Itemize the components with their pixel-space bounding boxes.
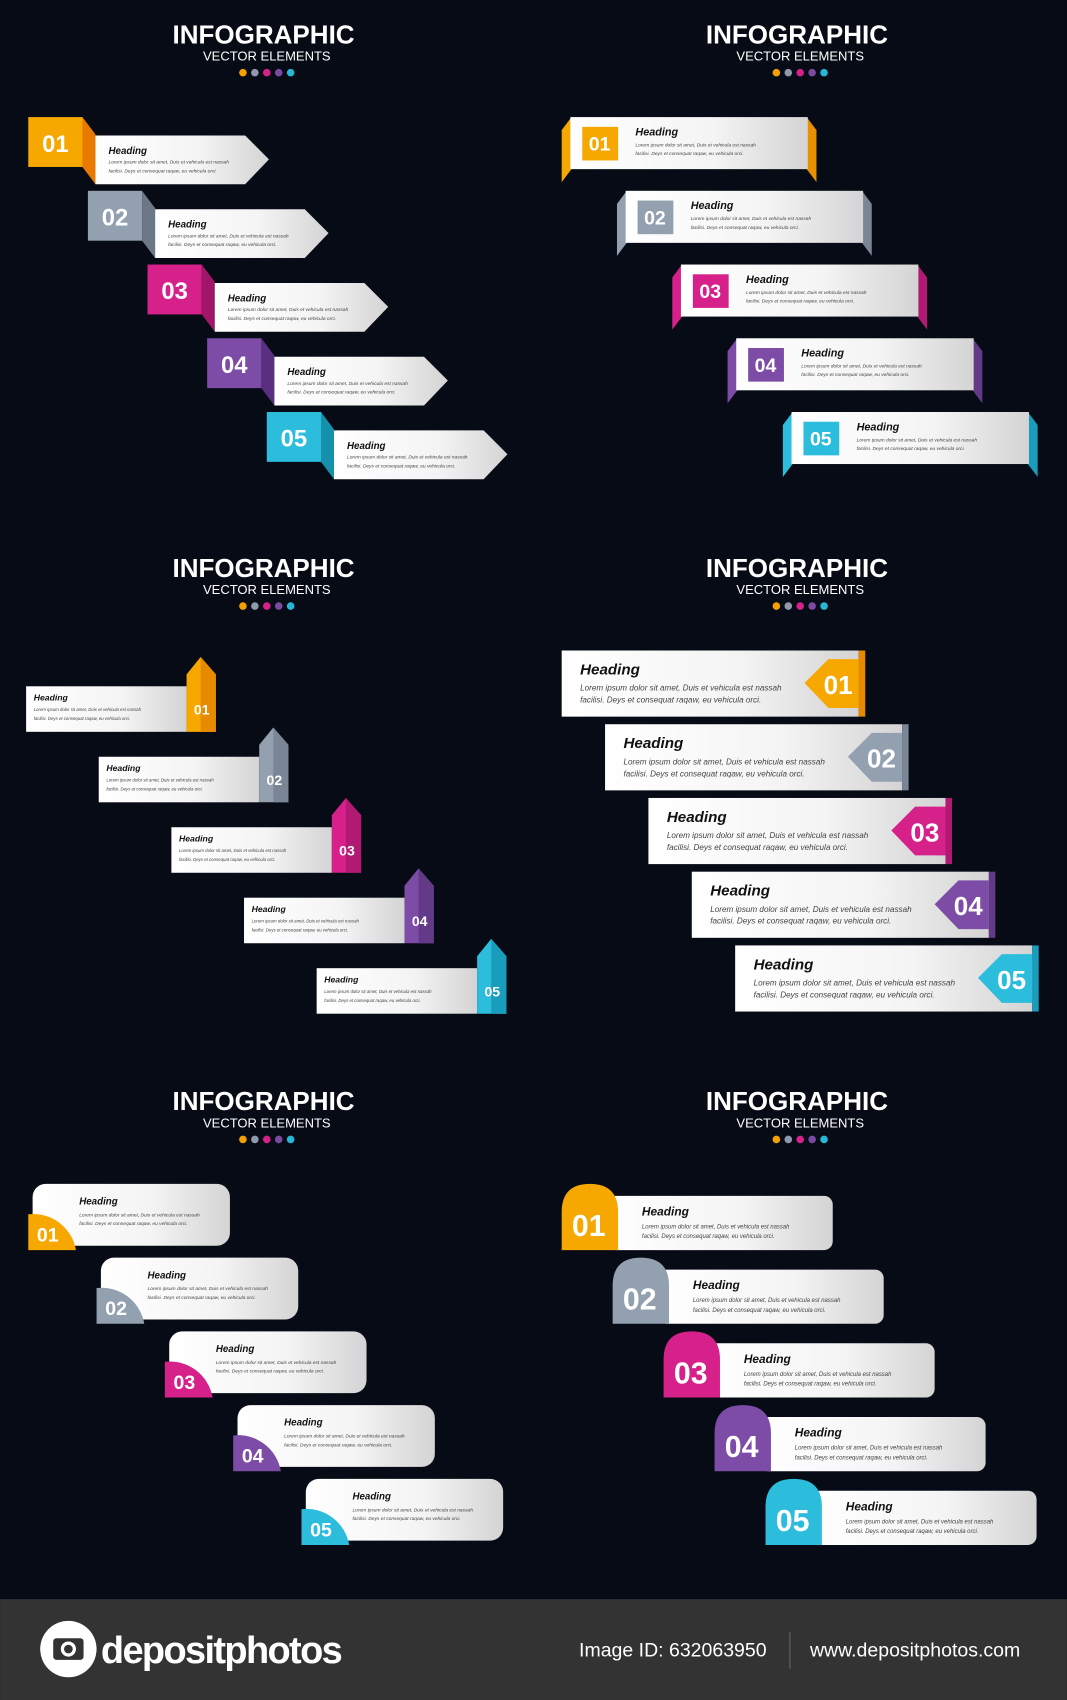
item 05: Lorem ipsum dolor sit amet, Duis et vehicula est nassah (347, 455, 468, 461)
item 01: facilisi. Deys et consequat raqaw, eu vehicula orci. (34, 716, 130, 721)
website: www.depositphotos.com (809, 1640, 1020, 1662)
item 04: 04 (954, 891, 983, 921)
item 01: 01 (194, 701, 210, 717)
item 01: facilisi. Deys et consequat raqaw, eu vehicula orci. (642, 1234, 775, 1240)
item 03: Heading (744, 1352, 792, 1366)
item 01 (562, 1184, 833, 1250)
item 05 (783, 412, 1038, 477)
item 05: Lorem ipsum dolor sit amet, Duis et vehicula est nassah (352, 1507, 473, 1513)
item 02: Heading (148, 1270, 186, 1281)
item 05: Heading (857, 421, 900, 433)
item 04: Heading (795, 1426, 842, 1440)
item 03: 03 (699, 281, 721, 303)
item 01: facilisi. Deys et consequat raqaw, eu vehicula orci. (580, 696, 761, 705)
item 04: facilisi. Deys et consequat raqaw, eu vehicula orci. (710, 917, 891, 926)
item 03: Heading (216, 1344, 254, 1355)
item 02: Lorem ipsum dolor sit amet, Duis et vehicula est nassah (691, 216, 811, 222)
item 01: Lorem ipsum dolor sit amet, Duis et vehicula est nassah (642, 1224, 790, 1230)
logo icon (40, 1621, 97, 1677)
item 01: Lorem ipsum dolor sit amet, Duis et vehicula est nassah (108, 160, 229, 166)
panel: bottom-right tabs (562, 1086, 1037, 1545)
item 03 (165, 1331, 367, 1398)
panel: bottom-left rounded cards (28, 1086, 503, 1545)
item 03: Lorem ipsum dolor sit amet, Duis et vehicula est nassah (667, 831, 869, 840)
item 01: facilisi. Deys et consequat raqaw, eu vehicula orci. (635, 151, 744, 157)
title: INFOGRAPHIC (706, 1086, 888, 1116)
item 05: facilisi. Deys et consequat raqaw, eu vehicula orci. (324, 998, 421, 1003)
item 05 (317, 939, 506, 1014)
item 03: Lorem ipsum dolor sit amet, Duis et vehicula est nassah (744, 1372, 892, 1378)
item 01 (562, 117, 816, 182)
logo text: depositphotos (101, 1630, 342, 1672)
item 01: 01 (37, 1224, 59, 1246)
item 04 (728, 338, 982, 403)
item 03 (672, 265, 927, 330)
item 01 (562, 651, 865, 717)
item 04: Lorem ipsum dolor sit amet, Duis et vehicula est nassah (252, 919, 359, 924)
title: VECTOR ELEMENTS (203, 1116, 331, 1131)
item 03: 03 (674, 1357, 708, 1390)
item 05: Heading (324, 974, 359, 984)
item 05: Lorem ipsum dolor sit amet, Duis et vehicula est nassah (846, 1519, 994, 1525)
item 04: 04 (242, 1446, 264, 1468)
item 03: Lorem ipsum dolor sit amet, Duis et vehicula est nassah (746, 290, 867, 296)
item 03: Lorem ipsum dolor sit amet, Duis et vehicula est nassah (179, 848, 287, 853)
title: INFOGRAPHIC (706, 553, 888, 583)
item 03: Lorem ipsum dolor sit amet, Duis et vehicula est nassah (216, 1360, 337, 1366)
item 01: Heading (635, 127, 679, 139)
item 03: facilisi. Deys et consequat raqaw, eu vehicula orci. (216, 1369, 324, 1375)
item 02: 02 (105, 1298, 127, 1320)
title: INFOGRAPHIC (706, 19, 888, 49)
panel: top-left arrows (28, 19, 507, 479)
item 04: Heading (801, 348, 844, 360)
item 05: 05 (310, 1519, 332, 1541)
item 02 (605, 724, 909, 790)
item 02: 02 (867, 744, 896, 774)
item 04: facilisi. Deys et consequat raqaw, eu vehicula orci. (801, 372, 910, 378)
item 02: 02 (267, 772, 282, 788)
item 01 (26, 657, 216, 732)
item 02: Heading (691, 200, 734, 212)
item 04: Heading (710, 883, 770, 900)
item 01: Heading (642, 1204, 690, 1218)
item 05 (301, 1479, 503, 1545)
item 05 (267, 412, 507, 479)
item 05: 05 (484, 983, 500, 999)
item 05: facilisi. Deys et consequat raqaw, eu vehicula orci. (754, 990, 935, 999)
item 01: Heading (580, 661, 640, 678)
item 04 (244, 868, 434, 943)
item 01: Lorem ipsum dolor sit amet, Duis et vehicula est nassah (580, 684, 782, 693)
item 02: Lorem ipsum dolor sit amet, Duis et vehicula est nassah (148, 1286, 268, 1292)
item 03: facilisi. Deys et consequat raqaw, eu vehicula orci. (667, 843, 848, 852)
item 04: 04 (221, 352, 248, 379)
title (172, 19, 355, 76)
item 01: facilisi. Deys et consequat raqaw, eu vehicula orci. (108, 168, 217, 174)
item 01: Heading (34, 692, 69, 702)
item 01: Lorem ipsum dolor sit amet, Duis et vehicula est nassah (635, 142, 756, 148)
item 01: Lorem ipsum dolor sit amet, Duis et vehicula est nassah (79, 1212, 200, 1218)
footer (0, 1599, 1067, 1700)
title (706, 1086, 888, 1143)
item 02: facilisi. Deys et consequat raqaw, eu vehicula orci. (693, 1308, 826, 1314)
item 05: 05 (776, 1505, 810, 1538)
item 04 (233, 1405, 435, 1471)
item 05: facilisi. Deys et consequat raqaw, eu vehicula orci. (846, 1529, 978, 1535)
title: VECTOR ELEMENTS (736, 1116, 864, 1131)
panel: middle-left towers (26, 553, 506, 1014)
item 03 (171, 798, 361, 873)
item 03: Heading (179, 833, 214, 843)
title: VECTOR ELEMENTS (736, 49, 864, 64)
item 01 (28, 117, 269, 184)
item 04: facilisi. Deys et consequat raqaw, eu vehicula orci. (252, 927, 348, 932)
item 04: facilisi. Deys et consequat raqaw, eu vehicula orci. (284, 1442, 392, 1448)
title (706, 19, 888, 76)
item 02: Heading (693, 1278, 741, 1292)
title (706, 553, 888, 610)
title: INFOGRAPHIC (172, 553, 355, 583)
item 03: Heading (228, 293, 266, 304)
item 04: facilisi. Deys et consequat raqaw, eu vehicula orci. (287, 390, 396, 396)
item 01: 01 (824, 670, 853, 700)
item 02: Lorem ipsum dolor sit amet, Duis et vehicula est nassah (168, 233, 289, 239)
item 04: Lorem ipsum dolor sit amet, Duis et vehicula est nassah (284, 1434, 405, 1440)
item 02: Lorem ipsum dolor sit amet, Duis et vehicula est nassah (106, 778, 214, 783)
item 05: Heading (347, 441, 386, 452)
item 01: facilisi. Deys et consequat raqaw, eu vehicula orci. (79, 1221, 188, 1227)
title: INFOGRAPHIC (172, 19, 355, 49)
item 05: Lorem ipsum dolor sit amet, Duis et vehicula est nassah (754, 979, 955, 988)
item 05: 05 (281, 426, 307, 453)
item 05: Lorem ipsum dolor sit amet, Duis et vehicula est nassah (857, 437, 977, 443)
item 02: 02 (623, 1284, 657, 1317)
item 01: Heading (108, 146, 147, 157)
item 04: 04 (755, 355, 777, 377)
item 03: facilisi. Deys et consequat raqaw, eu vehicula orci. (746, 298, 854, 304)
item 03 (648, 798, 952, 864)
item 02 (88, 191, 329, 258)
item 01 (28, 1184, 230, 1250)
item 05: Lorem ipsum dolor sit amet, Duis et vehicula est nassah (324, 989, 432, 994)
item 04: Lorem ipsum dolor sit amet, Duis et vehicula est nassah (287, 381, 408, 387)
item 02: facilisi. Deys et consequat raqaw, eu vehicula orci. (623, 769, 805, 778)
item 02 (617, 191, 872, 256)
item 04: Lorem ipsum dolor sit amet, Duis et vehicula est nassah (801, 364, 922, 370)
item 04 (715, 1405, 986, 1471)
item 05 (766, 1479, 1037, 1545)
item 02: facilisi. Deys et consequat raqaw, eu vehicula orci. (691, 225, 799, 231)
item 03: 03 (161, 278, 188, 305)
item 02 (97, 1258, 298, 1324)
title: VECTOR ELEMENTS (203, 582, 331, 597)
item 02: facilisi. Deys et consequat raqaw, eu vehicula orci. (168, 242, 276, 248)
item 04: 04 (412, 913, 428, 929)
item 03: 03 (174, 1372, 195, 1394)
item 02: Lorem ipsum dolor sit amet, Duis et vehicula est nassah (623, 757, 825, 766)
item 03 (148, 265, 388, 332)
item 03: Lorem ipsum dolor sit amet, Duis et vehicula est nassah (228, 307, 349, 313)
item 01: Lorem ipsum dolor sit amet, Duis et vehicula est nassah (34, 707, 142, 712)
item 04: Heading (287, 367, 326, 378)
item 03: facilisi. Deys et consequat raqaw, eu vehicula orci. (744, 1382, 877, 1388)
item 03: Heading (667, 809, 727, 826)
item 03: facilisi. Deys et consequat raqaw, eu vehicula orci. (179, 857, 275, 862)
item 01: Heading (79, 1197, 118, 1208)
title (172, 1086, 355, 1143)
item 02: Heading (623, 735, 683, 752)
item 03: facilisi. Deys et consequat raqaw, eu vehicula orci. (228, 316, 336, 322)
item 02: facilisi. Deys et consequat raqaw, eu vehicula orci. (148, 1295, 256, 1301)
item 02: Lorem ipsum dolor sit amet, Duis et vehicula est nassah (693, 1298, 841, 1304)
panel: middle-right arrow tags (562, 553, 1039, 1012)
title: INFOGRAPHIC (172, 1086, 355, 1116)
item 03: 03 (339, 842, 355, 858)
item 04: Lorem ipsum dolor sit amet, Duis et vehicula est nassah (795, 1446, 943, 1452)
item 04: Heading (284, 1418, 323, 1429)
item 05: Heading (352, 1491, 391, 1502)
item 02 (613, 1258, 884, 1324)
title: VECTOR ELEMENTS (736, 582, 864, 597)
item 03 (664, 1331, 935, 1398)
item 04 (692, 872, 995, 938)
item 05: 05 (997, 965, 1026, 995)
image id: Image ID: 632063950 (579, 1640, 767, 1662)
item 04 (207, 338, 448, 405)
item 01: 01 (589, 134, 611, 156)
item 05: facilisi. Deys et consequat raqaw, eu vehicula orci. (857, 446, 965, 452)
item 05: 05 (810, 429, 832, 451)
item 05: Heading (754, 956, 813, 973)
item 02: facilisi. Deys et consequat raqaw, eu vehicula orci. (106, 786, 203, 791)
item 01: 01 (572, 1210, 606, 1243)
item 03: Heading (746, 274, 789, 286)
item 04: facilisi. Deys et consequat raqaw, eu vehicula orci. (795, 1455, 927, 1461)
item 05: facilisi. Deys et consequat raqaw, eu vehicula orci. (347, 463, 455, 469)
item 02: 02 (102, 205, 128, 232)
item 04: 04 (725, 1431, 759, 1464)
item 02: Heading (168, 220, 207, 231)
title (172, 553, 355, 610)
item 02 (99, 727, 288, 802)
item 04: Lorem ipsum dolor sit amet, Duis et vehicula est nassah (710, 905, 912, 914)
item 05: Heading (846, 1499, 893, 1513)
item 02: Heading (106, 763, 141, 773)
item 01: 01 (42, 131, 69, 158)
item 03: 03 (910, 817, 939, 847)
item 04: Heading (252, 904, 286, 914)
item 02: 02 (644, 207, 666, 229)
panel: top-right banners (562, 19, 1038, 477)
item 05: facilisi. Deys et consequat raqaw, eu vehicula orci. (352, 1516, 461, 1522)
title: VECTOR ELEMENTS (203, 49, 331, 64)
item 05 (735, 945, 1039, 1012)
